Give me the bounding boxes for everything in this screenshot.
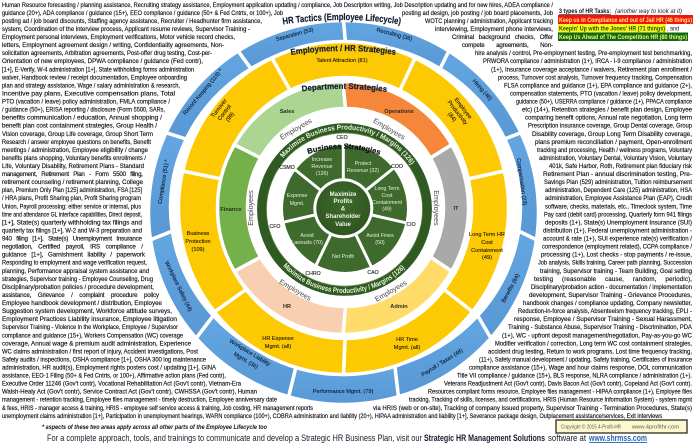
labels: executive roles: CAO (367, 270, 379, 276)
segment: Payroll / Taxes (395, 316, 491, 397)
text block: HR tasks wrapping the right side (373, 10, 693, 412)
text block: HR tasks wrapping the left side: 940 filing [1+], State(s) Unemployment Insurance (2, 236, 143, 242)
text block: HR tasks wrapping the right side: posting ad design, job posting / job board placements, Job (402, 10, 554, 17)
text block: HR tasks wrapping the left side: benefit plan cost containment strategies, Group Health / (2, 123, 157, 130)
text block: HR tasks wrapping the left side: [1+], State(s) quarterly withholding tax filings and (2, 219, 143, 226)
text block: HR tasks wrapping the right side: deposits (1+), State(s) Unemployment Insurance (SUI) (545, 219, 692, 226)
labels: business strategies wedges: Expense (287, 193, 307, 199)
segment: HR Time Mgmt. (344, 289, 472, 374)
labels: employees around inner circle: Employees (278, 277, 313, 303)
legend: 3 types of HR tasks: , and (667, 26, 679, 33)
segment: Compliance (149, 133, 186, 240)
legend: 3 types of HR tasks: 3 types of HR Tasks: (559, 8, 611, 15)
labels: departments: Admin (390, 304, 408, 310)
labels: business strategies wedges: (126) (316, 171, 328, 177)
labels: employees around inner circle: Employees (278, 116, 314, 142)
segment: Record Keeping (166, 51, 251, 139)
segment: Admin (343, 257, 452, 334)
labels: employment / HR strategies ring segments: (99) (225, 111, 236, 123)
text block: HR tasks wrapping the right side: response, Employee / Supervisor Training - Sexual Harassment, (514, 316, 692, 323)
labels: HR tactics ring segments: Workplace Liability (228, 339, 271, 368)
labels: business strategies wedges: Net Profit (332, 254, 355, 260)
labels: employment / HR strategies ring segments: Turnover (210, 98, 229, 119)
labels: business strategies wedges: (49) (382, 206, 392, 212)
labels: HR tactics ring segments: Mgmt. (36) (232, 352, 259, 371)
text block: HR tasks wrapping the left side: system, Coordination of the interview process, Applicant resume reviews, Supervisor Training - (2, 26, 250, 33)
text block: HR tasks wrapping the left side: Responding to employment and wage verification request, (2, 260, 147, 267)
text block: HR tasks wrapping the right side: via HRIS (web or on-site), Tracking of company issued property, Supervisor Training - Termination Procedures, State(s) (373, 405, 692, 412)
labels: employment / HR strategies ring segments: Productivity (446, 100, 468, 126)
segment: Separation (238, 20, 346, 69)
segment: IT (430, 145, 469, 271)
labels: employment / HR strategies ring segments (185, 58, 505, 351)
text block: HR tasks wrapping the right side: WOTC planning / administration, Applicant tracking (425, 18, 553, 25)
segment: Employee Productivity (400, 58, 504, 179)
segment: Finance (217, 145, 261, 271)
labels: business strategies wedges: Mgmt. (290, 201, 304, 207)
labels: employees around inner circle: Employees (432, 190, 441, 226)
text block: HR tasks wrapping the left side: guidance [1+], Garnishment liability / paperwork (2, 252, 146, 259)
panel: employment / HR strategies ring (178, 42, 509, 375)
text block: HR tasks wrapping the left side: Incentive pay plans, Executive compensation plans, Total (2, 90, 175, 98)
text block: HR tasks wrapping the right side: training, Supervisor training - Team Building, Goal setting (540, 268, 693, 275)
segment: Recruiting (344, 20, 449, 69)
text block: HR tasks wrapping the right side: distribution (1+), Federal unemployment administration - (543, 228, 692, 234)
segment: Operations (343, 82, 452, 158)
labels: business strategies wedges (287, 157, 403, 260)
text block: HR tasks wrapping the left side: coverage, Annual wage & premium audit administration, Experience (2, 340, 192, 347)
footnote: * aspects of these two areas apply across all other parts of the Employee Lifecycle too (42, 424, 267, 431)
labels: HR tactics ring segments: Hiring (46) (471, 79, 493, 102)
legend: 3 types of HR tasks: (another way to look at it) (615, 9, 682, 15)
labels: departments: Sales (280, 109, 294, 115)
labels: HR tactics ring segments: Workplace Safety (44) (163, 260, 193, 313)
ring: maximize business productivity / margins: Maximize Business Productivity / Margins (126) (280, 124, 414, 165)
segment: Talent Attraction (272, 42, 415, 90)
labels: departments: Finance (220, 207, 242, 213)
labels: HR tactics ring segments: Separation (53) (275, 27, 314, 43)
text block: HR tasks wrapping the left side: PTO (vacation / leave) policy administration, FMLA compliance / (2, 98, 170, 106)
labels: employment / HR strategies ring segments: Mgmt. (all) (394, 345, 420, 351)
text block: HR tasks wrapping the right side: testing (reasonable cause, random, periodic), (534, 276, 692, 283)
text block: HR tasks wrapping the left side: negotiation, Certified payroll, IRS compliance / (2, 244, 143, 251)
copyright box (556, 420, 687, 433)
text block: HR tasks wrapping the left side: / HRA plans, Profit Sharing plan, Profit Sharing program (2, 195, 141, 202)
text block: HR tasks wrapping the left side: time and attendance GL interface capabilities, Direct deposit, (2, 211, 142, 218)
labels: HR tactics ring segments: Performance Mgmt. (79) (313, 389, 373, 395)
text block: HR tasks wrapping the left side: [1+], E-Verify, W-4 administration [1+], State withholding forms administration (2, 66, 194, 73)
labels: HR tactics ring segments: Compensation (23) (515, 158, 527, 206)
text block: HR tasks wrapping the left side: planning, Performance appraisal system assistance and (2, 268, 150, 275)
segment: Compensation (505, 133, 538, 240)
segment: Benefits (478, 231, 536, 338)
text block: HR tasks wrapping the left side: management - retention tracking, Employee files management - timely destruction, Employee anniversary date (2, 397, 277, 404)
labels: business strategies wedges: Cost (382, 193, 393, 199)
labels: employment / HR strategies ring segments: (49) (482, 255, 492, 261)
text block: HR tasks wrapping the left side: Safety audits / inspections, OSHA compliance [1+], OSHA 300 log maintenance (2, 356, 207, 363)
text block: HR tasks wrapping the left side: & fees, HRIS - manager access & training, HRIS - employee self service access & training, Job costing, HR management reports (2, 405, 313, 412)
legend: 3 types of HR tasks: Keepin' Up with the Jones' HR (71 things) (559, 26, 665, 33)
copyright box: www.4profithr.com (632, 424, 679, 430)
panel: department strategies ring (217, 81, 469, 334)
segment: Hiring (440, 51, 521, 139)
labels: HR tactics ring segments: Record Keeping (119) * (182, 68, 225, 117)
text block: HR tasks wrapping the right side: Disability coverage, Group Long Term Disability coverage, (532, 131, 692, 138)
text block: HR tasks wrapping the left side: Executive Order 11246 (Gov't contr), Vocational Rehabilitation Act (Gov't contr), Vietnam-Era (2, 381, 242, 388)
labels: business strategies wedges: Long Term (375, 186, 400, 192)
text block: HR tasks wrapping the left side: benefits communication / education, Annual shopping / (2, 115, 162, 122)
labels: departments: Operations (384, 109, 414, 115)
labels: employment / HR strategies ring segments: Employee (452, 97, 473, 120)
center: maximize profits and shareholder value: Profits (333, 199, 353, 205)
segment: Long Term HR Cost Containment (444, 171, 509, 312)
center: maximize profits and shareholder value (316, 181, 370, 235)
labels: executive roles: COO (391, 164, 403, 170)
text block: HR tasks wrapping the right side: interviewing, Employment phone interviews, (435, 26, 553, 33)
segment: HR Expense Mgmt. (214, 289, 345, 374)
segment: HR (234, 257, 346, 334)
text block: HR tasks wrapping the left side: solicitation agreements, Arbitration agreements, Post-offer drug testing, Cost-per- (2, 50, 212, 57)
labels: business strategies wedges: Revenue (311, 164, 333, 170)
heading: Business Strategies: Business Strategies (307, 143, 380, 155)
center: maximize profits and shareholder value: Value (335, 222, 351, 228)
text block: HR tasks wrapping the right side: accident drug testing, Return to work programs, Lost time frequency tracking, (488, 348, 692, 355)
text block: HR tasks wrapping the left side: Life, Voluntary Disability, Retirement Plans - Standard (2, 163, 145, 170)
panel: HR tactics ring (employee lifecycle) (149, 20, 538, 404)
copyright box: Copyright © 2015 4-Profit-HR (561, 424, 621, 430)
text block: HR tasks wrapping the left side: WC claims administration / first report of injury, Accident investigations, Post (2, 348, 198, 355)
text block: HR tasks wrapping the left side: Research / answer employee questions on benefits, Benefit (2, 139, 151, 146)
heading: Department Strategies: Department Strategies (302, 83, 387, 92)
labels: business strategies wedges: (50) (375, 240, 385, 246)
text block: HR tasks wrapping the left side: compliance and guidance (15+), Workers Compensation (WC) coverage (2, 332, 184, 339)
labels: business strategies wedges: Protect (355, 161, 372, 167)
text block: HR tasks wrapping the left side: Walsh-Healy Act (Gov't contr), Service Contract Act (Gov't contr), CWHSSA (Gov't contr), Human (2, 389, 258, 396)
labels: employment / HR strategies ring segments: Mgmt. (all) (265, 344, 291, 350)
chart: business strategies wheel (279, 142, 408, 272)
labels: executive roles: CHRO (305, 271, 321, 277)
text block: HR tasks wrapping the left side: Supervisor Training - Violence in the Workplace, Employee / Supervisor (2, 324, 178, 331)
labels: employment / HR strategies ring segments: Cost (481, 240, 493, 246)
text block: HR tasks wrapping the left side: Human Resource forecasting / planning assistance, Recruiting strategy assistance, Employment application updating / compliance, Job Description writing, Job Description updating and for new hires, ADEA compliance / (2, 2, 553, 9)
text block: HR tasks wrapping the left side: letters, Employment agreement design / writing, Confidentiality agreements, Non- (2, 42, 224, 49)
text block: HR tasks wrapping the left side: administration, HR audit(s), Employment rights posters cost / updating [1+], GINA (2, 364, 217, 372)
segment: Workplace Safety (150, 231, 213, 338)
text block: HR tasks wrapping the right side: Retirement Plan - annual discrimination testing, Pre- (543, 171, 692, 178)
text block: HR tasks wrapping the left side: meetings / administration, Employee eligibility / change (2, 147, 149, 154)
labels: employment / HR strategies ring segments: HR Time (396, 337, 418, 343)
labels: business strategies wedges: Revenue (32) (347, 168, 379, 174)
labels: business strategies wedges: Lawsuits (70) (291, 240, 323, 246)
text block: HR tasks wrapping the left side: assistance, EEO-1 Filing (50+ & Fed Cntrts, or 100+), Affirmative action plans (Fed contr), (2, 373, 226, 380)
text block: HR tasks wrapping the left side: Vision coverage, Group Life coverage, Group Short Term (2, 131, 153, 138)
heading: Employment / HR Strategies: Employment / HR Strategies (290, 44, 396, 56)
text block: HR tasks wrapping the left side: Employment personal interviews, Employment verifications, Motor vehicle record checks, (2, 34, 235, 41)
text block: HR tasks wrapping the left side: Orientation of new employees, DPWA compliance / guidance (Fed contr), (2, 58, 203, 65)
text block: HR tasks wrapping the left side: Disciplinary/probation policies / procedure development, (2, 284, 154, 291)
labels: business strategies wedges: Avoid Fines (366, 233, 394, 239)
text block: HR tasks wrapping the right side: compliance assistance (15+), Wage and hour claims response, DOL communication (469, 364, 693, 372)
labels: departments: IT (454, 206, 459, 212)
text block: HR tasks wrapping the right side: (1+), WC - upfront deposit management/negotiation, Pay-as-you-go WC (502, 332, 693, 339)
center: maximize profits and shareholder value: Shareholder (325, 214, 361, 220)
labels: business strategies wedges: Avoid (300, 233, 314, 239)
segment: Performance Mgmt. (289, 366, 398, 404)
segment: Business Protection (178, 171, 246, 312)
labels: employment / HR strategies ring segments: Talent Attraction (81) (316, 58, 368, 64)
labels: executive roles (270, 135, 416, 277)
call to action line: software at (548, 433, 586, 443)
text block: HR tasks wrapping the left side: / guidance (50+), ERISA reporting / disclosure (Form 5500, SARs, (2, 107, 165, 114)
text block: HR tasks wrapping the left side: Union, Payroll processing: either service or internal, plus (2, 203, 141, 210)
text block: HR tasks wrapping the left side: plan and strategy assistance, Wage / salary administration & research, (2, 82, 180, 89)
ring: maximize business productivity / margins: Maximize Business Productivity / Margins (126) (283, 262, 406, 294)
call to action line: For a complete approach, tools, and trainings to communicate and develop a Strategic HR Business Plan, visit our (47, 433, 422, 443)
labels: employment / HR strategies ring segments: Business (187, 231, 210, 237)
segment: Turnover Control (183, 58, 290, 179)
labels: employment / HR strategies ring segments: (109) (191, 247, 205, 253)
labels: employees around inner circle (246, 116, 441, 304)
labels: executive roles: CIO (406, 222, 416, 228)
text block: HR tasks wrapping the left side: Employment Practices Liability insurance, Employee litigation (2, 316, 178, 323)
text block: HR tasks wrapping the left side: benefits plans shopping, Voluntary benefits enrollments / (2, 155, 146, 162)
labels: employment / HR strategies ring segments: Containment (471, 248, 503, 254)
labels: executive roles: CEO (336, 135, 348, 141)
text block: HR tasks wrapping the left side: assistance, Grievance / complaint procedure policy (2, 292, 160, 299)
labels: employment / HR strategies ring segments: Control (217, 104, 233, 122)
text block: HR tasks wrapping the right side: plans premium reconciliation / payment, Open-enrollment (535, 139, 692, 146)
labels: HR tactics ring segments: Payroll / Taxes (48) (421, 348, 464, 378)
segment: Workplace Liability Mgmt. (196, 316, 296, 397)
text block: HR tasks wrapping the left side: strategies, Supervisor training - Employee Counseling, Drug (2, 276, 153, 283)
center: maximize profits and shareholder value: & (341, 206, 346, 212)
labels: employment / HR strategies ring segments: HR Expense (262, 336, 294, 342)
call to action line: www.shrmss.com (588, 433, 647, 443)
labels: executive roles: CFO (270, 224, 280, 230)
labels: employment / HR strategies ring segments: (84) (446, 112, 457, 123)
labels: employees around inner circle: Employees (372, 116, 407, 142)
legend: 3 types of HR tasks (558, 8, 693, 41)
call to action line: Strategic HR Management Solutions (424, 433, 545, 443)
heading: HR Tactics (Employee Lifecycle): HR Tactics (Employee Lifecycle) (282, 13, 401, 26)
text block: HR tasks wrapping the left side: Suggestion system development, Workforce attitude surveys, (2, 308, 172, 315)
labels: employment / HR strategies ring segments: Protection (185, 239, 211, 245)
text block: HR tasks wrapping the left side: retirement counseling / retirement planning, College (2, 179, 144, 186)
labels: HR tactics ring segments: Recruiting (36) (376, 27, 413, 43)
text block: HR tasks wrapping the right side: etc) (14+), Retention strategies / benefit plan design, Employee (522, 107, 693, 114)
text block: HR tasks wrapping the left side: quarterly tax filings [1+], W-2 and W-3 preparation and (2, 228, 143, 234)
text block: HR tasks wrapping the right side: development, Supervisor Training - Grievance Procedures, (529, 292, 692, 299)
labels: HR tactics ring segments: Benefits (64) (501, 273, 521, 304)
text block: HR tasks wrapping the left side: plan, Premium Only Plan [125] administration, FSA [125] (2, 187, 142, 194)
text block: HR tasks wrapping the left side: guidance (20+), ADA compliance / guidance (15+), EEO compliance / guidance (50+ & Fed Cntrts, or 100+), Job (2, 10, 283, 17)
text block: HR tasks wrapping the left side: management, Retirement Plan - Form 5500 filing, (2, 171, 143, 178)
text block: HR tasks wrapping the left side: Employee handbook development / distribution, Employee (2, 300, 163, 307)
labels: employment / HR strategies ring segments: Long Term HR (469, 232, 505, 238)
text block: HR tasks wrapping the right side: processing (1+), Lost checks - stop payments / re-issue, (541, 252, 692, 259)
labels: executive roles: CSMO (279, 165, 295, 171)
labels: employees around inner circle: Employees (373, 278, 409, 304)
text block: HR tasks wrapping the right side: comparing benefit options, Annual rate negotiation, Long term (525, 115, 692, 122)
labels: HR tactics ring segments: Compliance (51) * (158, 158, 171, 204)
center: maximize profits and shareholder value: Maximize (330, 192, 357, 198)
labels: HR tactics ring segments (158, 27, 527, 395)
labels: departments (220, 109, 459, 310)
text block: HR tasks wrapping the right side: Criminal background checks, Offer (452, 34, 553, 41)
labels: employees around inner circle: Employees (246, 190, 255, 226)
text block: HR tasks wrapping the left side: posting ad / job board discounts, Staffing agency assistance, Recruiter / Headhunter firm assistance, (2, 18, 262, 25)
segment: Sales (234, 81, 346, 158)
labels: departments: HR (283, 304, 291, 310)
labels: business strategies wedges: Containment (372, 200, 403, 206)
text block: HR tasks wrapping the left side: waiver, Handbook review / receipt documentation, Employee onboarding (1, 74, 188, 81)
text block: HR tasks wrapping the right side: compete agreements, Non- (462, 42, 553, 49)
text block: HR tasks wrapping the right side: account & rate (1+), SUI experience rate(s) verification / (543, 236, 692, 242)
labels: business strategies wedges: Increase (312, 157, 332, 163)
ring: maximize business productivity / margins (257, 123, 432, 296)
